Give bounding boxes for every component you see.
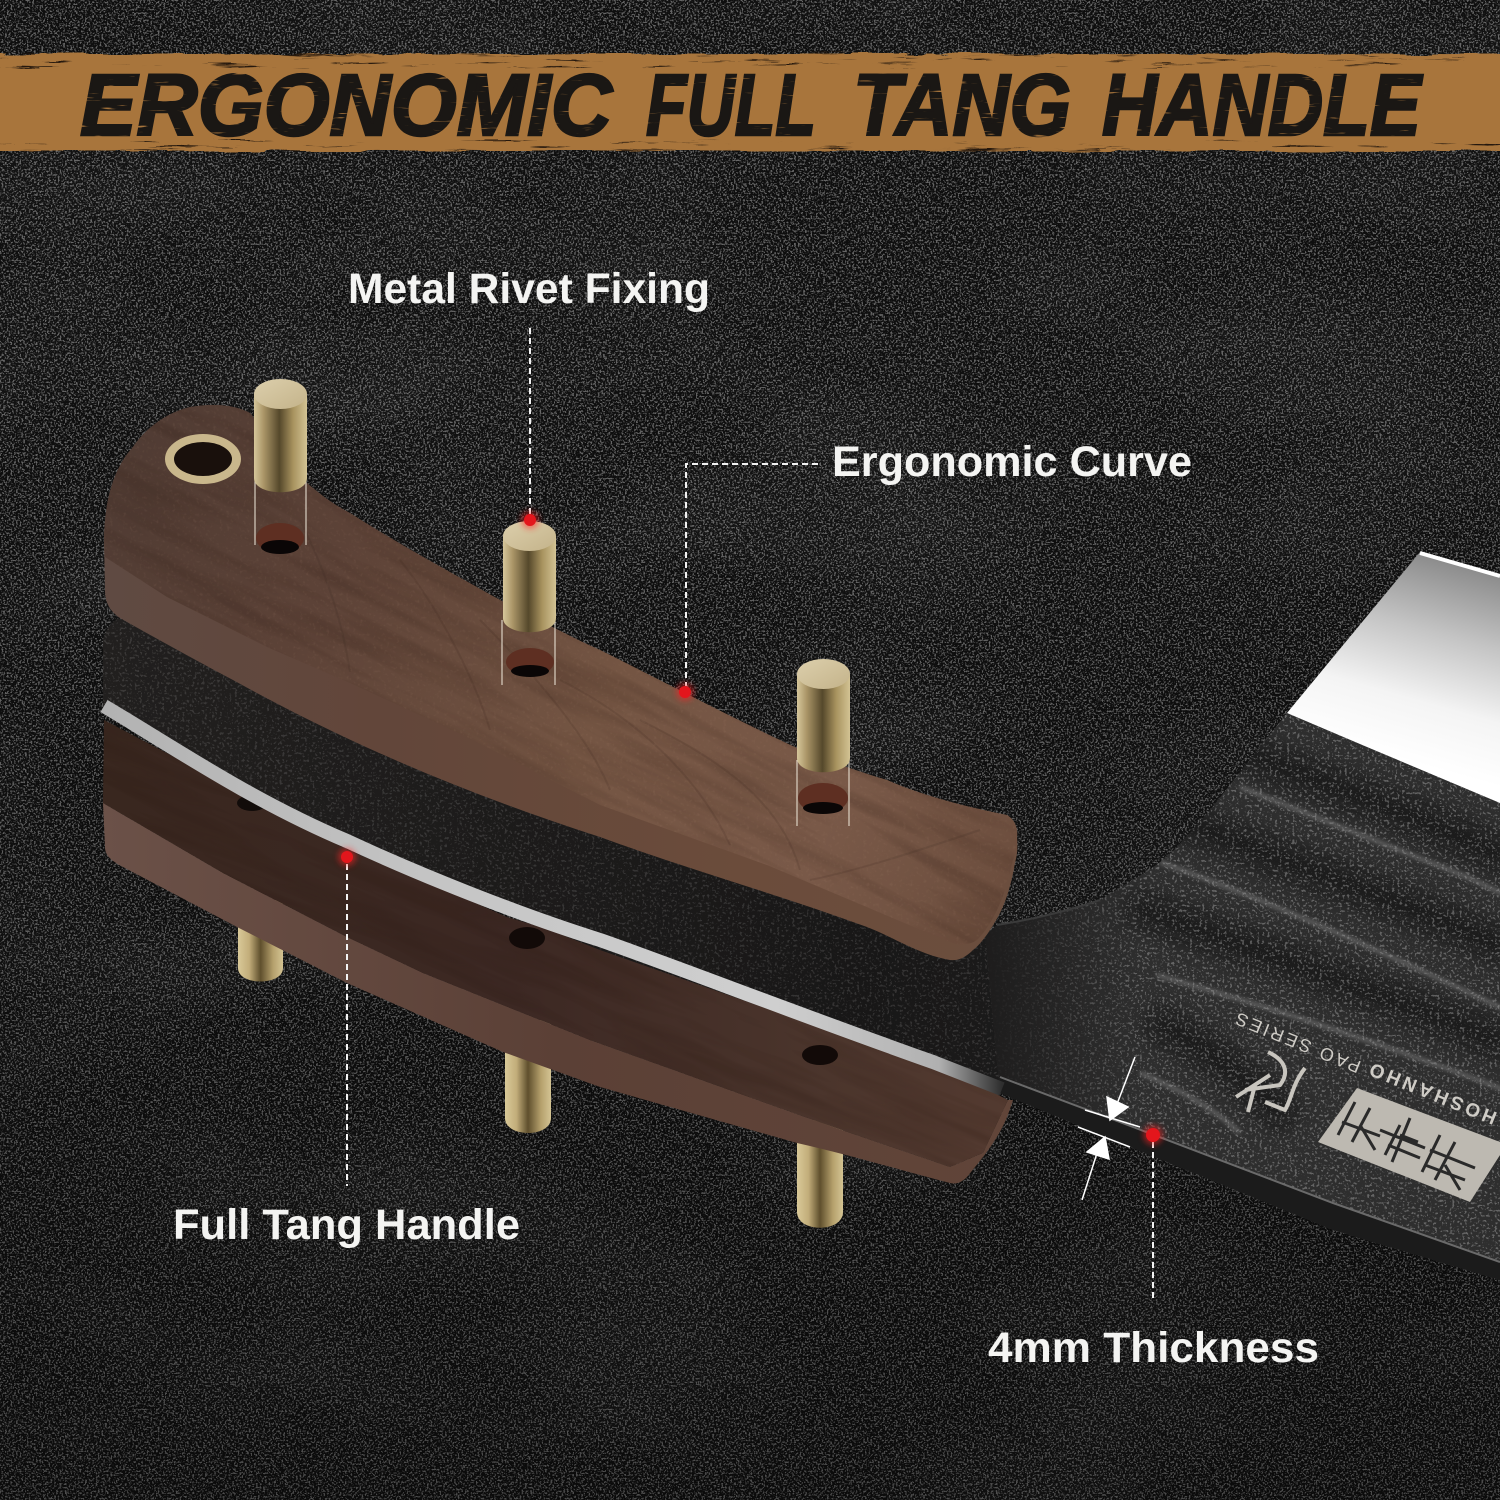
blade mirror polish xyxy=(1287,552,1500,803)
blade engraving xyxy=(1233,1008,1500,1202)
lower rivets xyxy=(238,900,843,1228)
leader line xyxy=(529,328,531,514)
rivet 1 lower xyxy=(238,900,283,982)
callout: 4mm thickness xyxy=(988,1057,1319,1372)
lower scale side face xyxy=(103,803,1013,1183)
callout: ergonomic curve xyxy=(676,438,1192,701)
label: Ergonomic Curve xyxy=(832,438,1192,486)
label: 4mm Thickness xyxy=(988,1324,1319,1372)
rivet 3 xyxy=(797,659,850,772)
thickness arrows xyxy=(1078,1057,1140,1200)
banner brush stroke xyxy=(0,52,1500,152)
leader line xyxy=(686,464,818,686)
lower scale dark face xyxy=(103,720,1008,1167)
lower handle scale xyxy=(103,720,1013,1184)
callout: full tang handle xyxy=(173,848,520,1249)
rivet guide lines xyxy=(255,480,849,826)
blade dark body xyxy=(980,700,1500,1290)
title: FULL xyxy=(646,57,816,154)
series text: PAO SERIES xyxy=(1233,1008,1363,1077)
blade ridges xyxy=(1140,787,1500,1133)
rivet 2 lower xyxy=(505,1020,551,1133)
blade forged grooves xyxy=(1130,745,1500,1120)
red dot xyxy=(338,848,356,866)
rivet 2 xyxy=(503,521,556,632)
rivet 1 xyxy=(254,379,307,492)
title xyxy=(80,57,1424,154)
label: Full Tang Handle xyxy=(173,1201,520,1249)
upper rivets xyxy=(254,379,850,772)
knife blade xyxy=(980,552,1500,1290)
title: ERGONOMIC xyxy=(80,57,613,154)
title banner xyxy=(0,52,1500,154)
blade bevel xyxy=(1000,1077,1500,1290)
title: TANG xyxy=(853,57,1071,154)
blade spine line xyxy=(997,900,1100,925)
lanyard eyelet xyxy=(165,434,241,484)
silver edge line xyxy=(104,706,1002,1089)
rivet 3 lower xyxy=(797,1120,843,1228)
label: Metal Rivet Fixing xyxy=(348,265,710,313)
handle top face xyxy=(104,405,1017,944)
leader line xyxy=(346,864,348,1186)
tang steel xyxy=(100,610,1010,1100)
lower scale holes xyxy=(237,795,267,811)
rivet holes upper xyxy=(256,523,848,814)
leader line xyxy=(1152,1142,1154,1300)
title: HANDLE xyxy=(1102,57,1424,154)
red dot xyxy=(521,511,539,529)
red dot xyxy=(1143,1125,1163,1145)
upper handle scale xyxy=(104,405,1018,960)
red dot xyxy=(676,683,694,701)
wood cathedral grain xyxy=(461,622,980,880)
icon: seal stamp xyxy=(1318,1088,1500,1202)
callout: metal rivet fixing xyxy=(348,265,710,529)
brand text: HOSHANHO xyxy=(1367,1058,1500,1128)
handle bevel xyxy=(104,405,1017,960)
icon: brand mark xyxy=(1236,1052,1305,1112)
